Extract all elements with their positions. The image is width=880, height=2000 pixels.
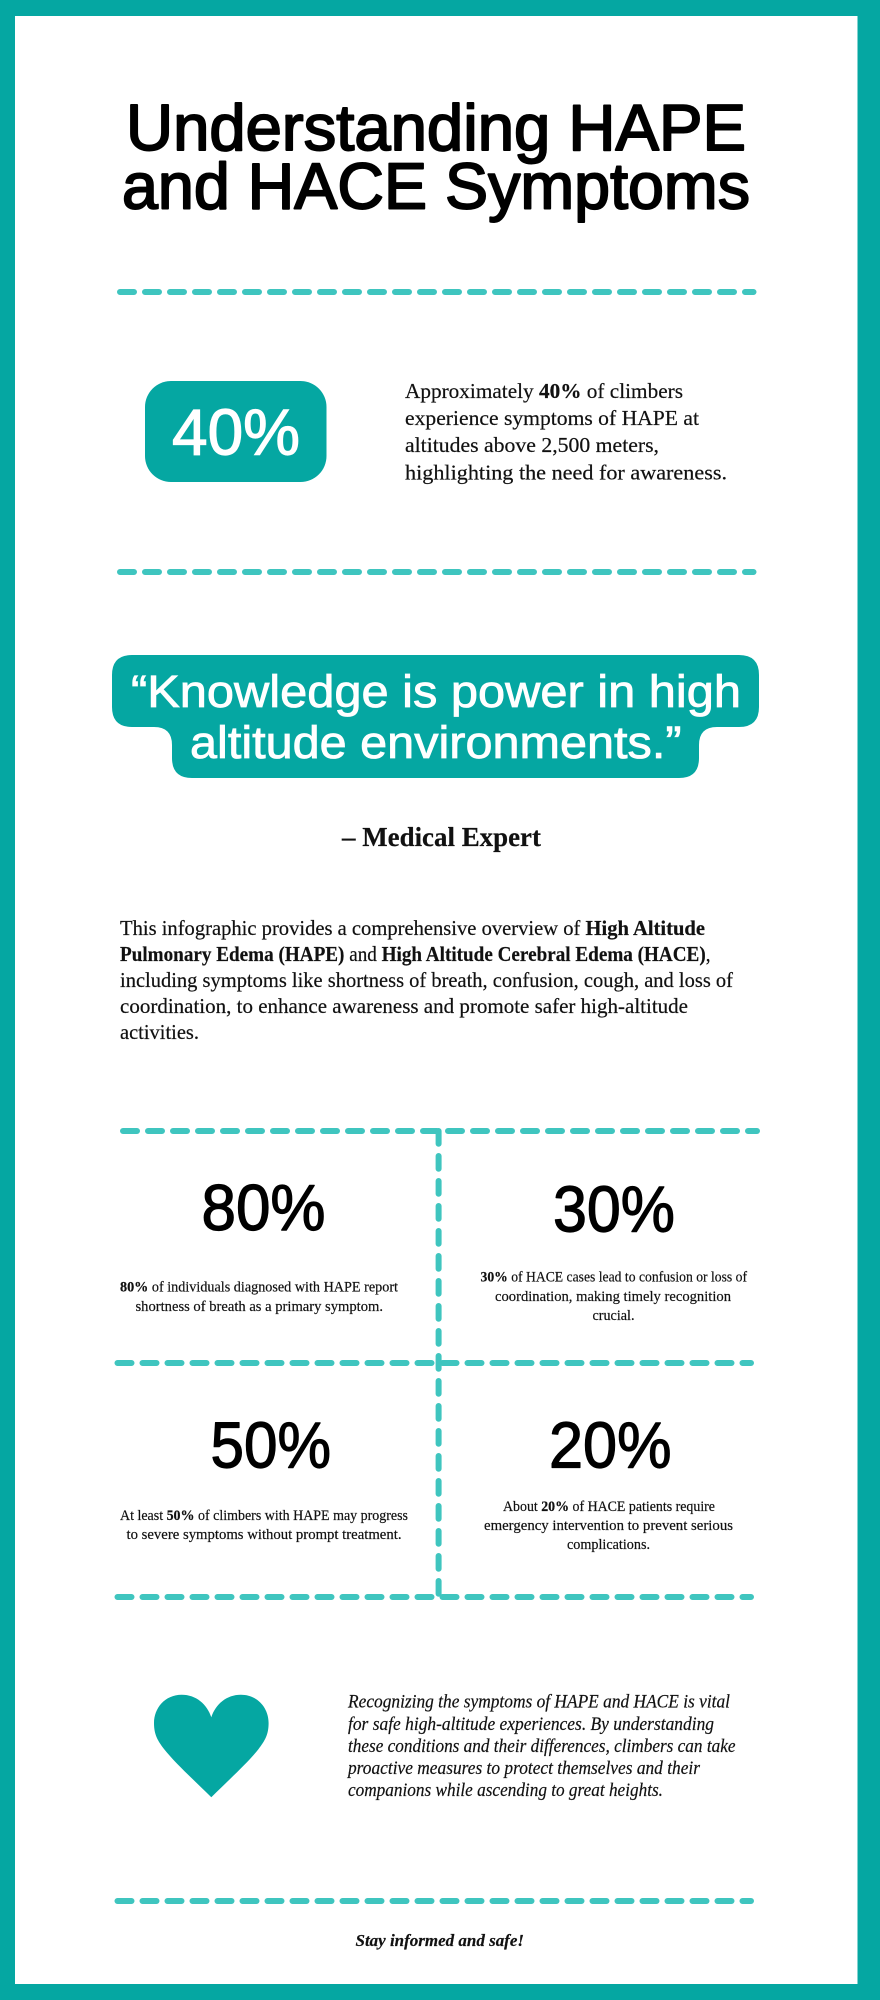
text block: overview: activities.	[120, 1020, 199, 1044]
text block: 40% description	[405, 379, 727, 484]
stat: 20%: complications.	[567, 1537, 650, 1553]
stat: 20%: About 20% of HACE patients require	[503, 1499, 715, 1515]
stat: 30%: coordination, making timely recognition	[495, 1289, 732, 1305]
text block: overview: including symptoms like shortness of breath, confusion, cough, and loss of	[120, 968, 733, 992]
text block: 40% description: Approximately 40% of climbers	[405, 379, 683, 403]
stat: 80%	[120, 1171, 398, 1315]
stat: 50%	[120, 1408, 408, 1543]
stat: 30%: crucial.	[592, 1308, 634, 1324]
stat: 50%: to severe symptoms without prompt treatment.	[126, 1527, 402, 1543]
icon: heart	[154, 1695, 269, 1797]
text block: conclusion: Recognizing the symptoms of HAPE and HACE is vital	[347, 1692, 730, 1712]
text block: overview	[120, 916, 733, 1044]
stat: 30%: 30% of HACE cases lead to confusion or loss of	[480, 1270, 747, 1286]
text block: overview: coordination, to enhance awareness and promote safer high-altitude	[120, 994, 688, 1018]
title	[122, 91, 750, 222]
stat: 50%: At least 50% of climbers with HAPE may progress	[120, 1508, 408, 1524]
stat: 30%: 30%	[553, 1172, 675, 1246]
title: and HACE Symptoms	[122, 150, 750, 222]
text block: overview: This infographic provides a comprehensive overview of High Altitude	[120, 916, 705, 940]
stat: 30%	[480, 1172, 747, 1324]
stat: 20%	[484, 1408, 733, 1553]
text block: conclusion	[346, 1692, 736, 1801]
text block: conclusion: for safe high-altitude experiences. By understanding	[348, 1714, 714, 1735]
quote banner: altitude environments.”	[190, 717, 682, 768]
stat: 20%: emergency intervention to prevent serious	[484, 1518, 733, 1534]
text block: overview: Pulmonary Edema (HAPE) and High Altitude Cerebral Edema (HACE),	[120, 942, 710, 966]
quote attribution: – Medical Expert	[341, 822, 541, 852]
quote banner: “Knowledge is power in high	[131, 666, 741, 717]
closing line: Stay informed and safe!	[356, 1931, 524, 1950]
title: Understanding HAPE	[126, 91, 746, 164]
text block: 40% description: altitudes above 2,500 meters,	[405, 433, 659, 457]
text block: conclusion: companions while ascending to great heights.	[348, 1780, 663, 1801]
text block: conclusion: these conditions and their differences, climbers can take	[348, 1736, 736, 1757]
stat: 80%: 80% of individuals diagnosed with HAPE report	[120, 1280, 398, 1296]
text block: 40% description: highlighting the need for awareness.	[405, 460, 727, 484]
statistics grid dividers	[118, 1131, 757, 1597]
stat callout: 40%: 40%	[172, 396, 300, 468]
text block: conclusion: proactive measures to protect themselves and their	[346, 1758, 701, 1779]
stat: 20%: 20%	[549, 1408, 672, 1482]
stat: 80%: shortness of breath as a primary symptom.	[136, 1299, 383, 1315]
quote banner	[112, 655, 759, 778]
stat callout: 40%	[145, 381, 326, 482]
stat: 80%: 80%	[202, 1171, 326, 1244]
stat: 50%: 50%	[210, 1408, 331, 1482]
text block: 40% description: experience symptoms of HAPE at	[405, 406, 699, 430]
